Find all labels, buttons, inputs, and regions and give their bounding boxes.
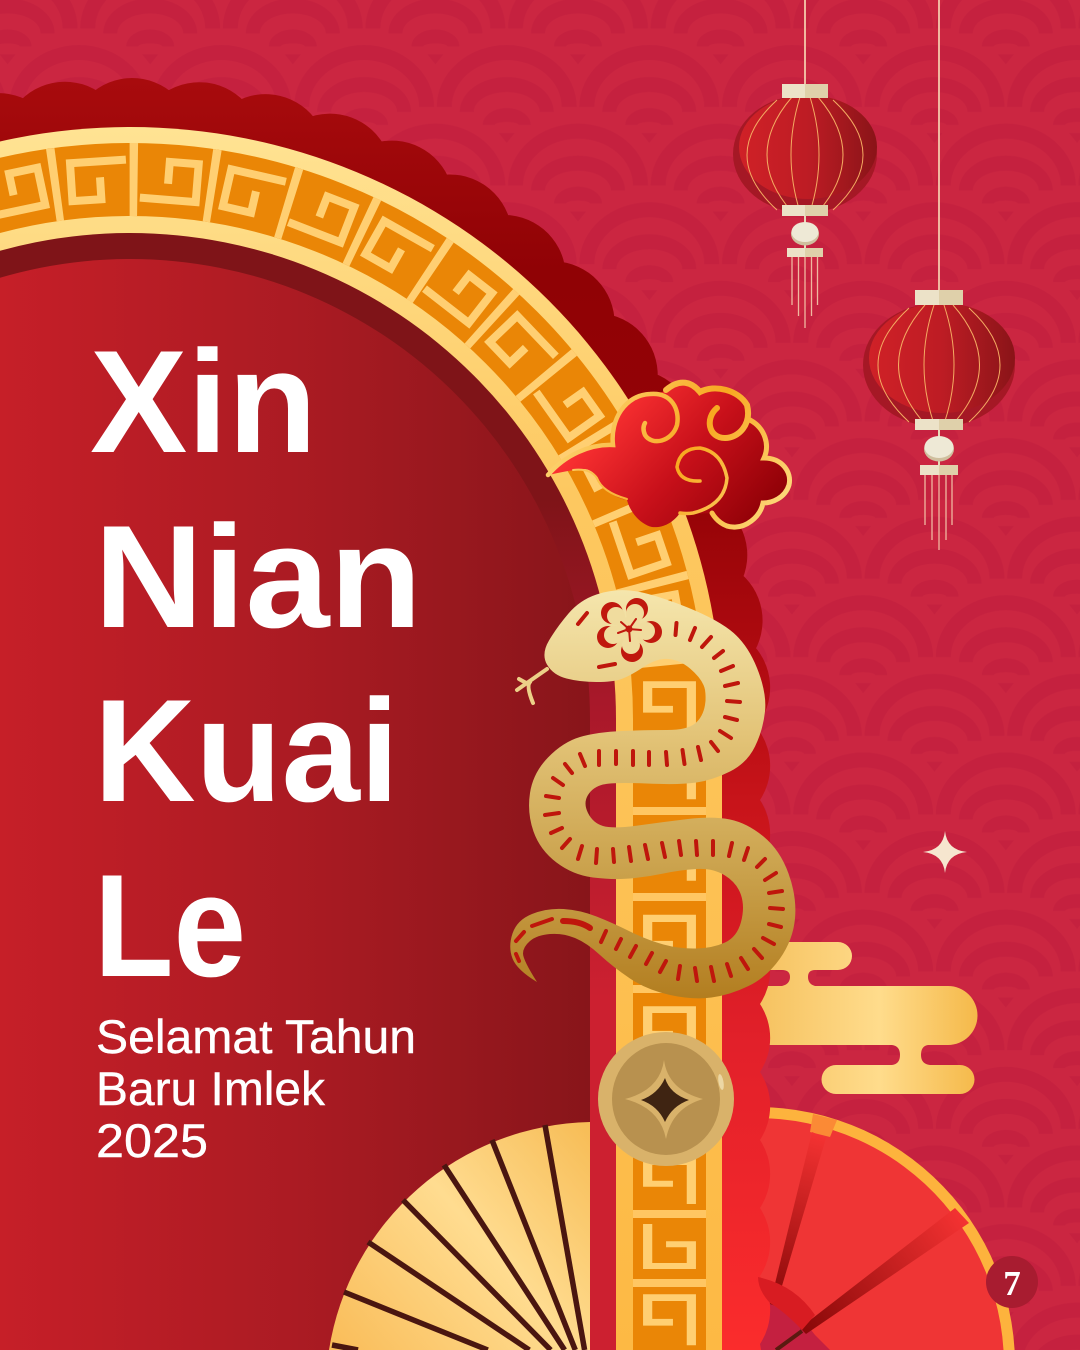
red auspicious cloud	[548, 382, 790, 527]
lantern right	[863, 0, 1015, 550]
coin rim	[598, 1032, 734, 1166]
snake tail mark	[563, 921, 590, 928]
bronze coin	[598, 1032, 734, 1166]
lantern body	[733, 95, 877, 213]
main red panel	[0, 259, 590, 1350]
subtitle: Selamat Tahun	[96, 1010, 416, 1063]
snake tongue	[517, 669, 547, 703]
cloud gold outlines	[548, 383, 790, 527]
lantern tassel	[792, 257, 818, 328]
right red fan	[700, 1107, 1015, 1350]
golden meander arch	[0, 127, 722, 1350]
lantern caps	[782, 84, 828, 216]
subtitle	[96, 1010, 416, 1167]
lantern bead	[920, 430, 958, 475]
page number badge: 7	[1003, 1264, 1021, 1303]
lantern bead	[787, 216, 823, 257]
left gold fan	[329, 1122, 590, 1350]
title	[90, 320, 422, 1007]
lantern left	[733, 0, 877, 328]
fan centre opening	[750, 1300, 830, 1350]
fan hand piece	[758, 1277, 815, 1330]
lantern caps	[915, 290, 963, 430]
title: Xin	[90, 320, 317, 483]
arch meander spirals	[0, 160, 691, 1345]
fan leaf	[329, 1122, 590, 1350]
snake scale marks	[516, 613, 783, 981]
title: Le	[94, 844, 246, 1007]
coin highlights	[717, 1074, 725, 1090]
fan rib two	[800, 1208, 969, 1334]
lantern body	[863, 303, 1015, 427]
arch orange band	[0, 180, 706, 1350]
fan gold rim	[700, 1107, 1015, 1350]
fan spokes	[332, 1125, 585, 1350]
coin face	[612, 1043, 720, 1155]
snake head flower	[597, 598, 662, 662]
lantern tassel	[925, 475, 952, 550]
lantern string	[938, 0, 940, 290]
page number badge	[986, 1256, 1038, 1308]
subtitle: Baru Imlek	[96, 1062, 325, 1115]
cloud fill	[548, 382, 790, 527]
arch gold band	[0, 127, 722, 1350]
snake body	[510, 590, 795, 998]
fan pivot line	[776, 1331, 802, 1350]
fan rib one	[770, 1132, 826, 1306]
title: Nian	[94, 495, 422, 658]
gold cloud decoration	[740, 942, 978, 1094]
title: Kuai	[94, 669, 399, 832]
scalloped red arch backing	[0, 119, 770, 1350]
fan red leaf	[700, 1118, 1004, 1350]
snake	[510, 590, 795, 998]
subtitle: 2025	[96, 1114, 208, 1167]
coin square hole	[641, 1078, 689, 1122]
coin star rim	[625, 1060, 703, 1139]
fan rim notch	[810, 1114, 837, 1137]
lantern string	[804, 0, 806, 84]
icon: sparkle star	[923, 831, 967, 873]
arch inner shadow	[0, 233, 616, 1350]
